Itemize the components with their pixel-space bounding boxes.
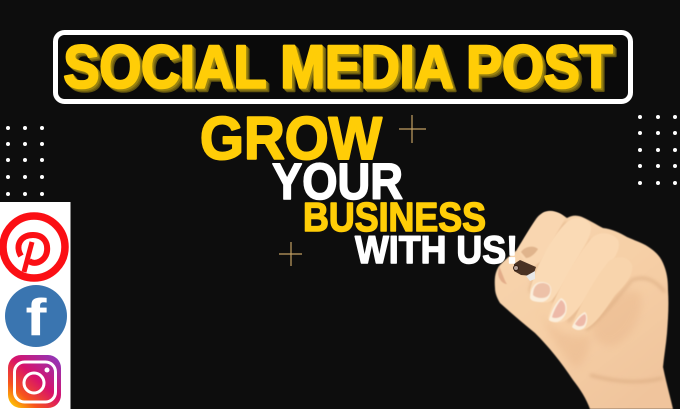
ring finger: [548, 233, 619, 323]
panel: social icons: [0, 202, 70, 409]
headline: GROW: GROW: [200, 105, 382, 172]
plus mark: bottom: [279, 242, 302, 266]
banner frame: [56, 32, 630, 102]
fingernails: [521, 247, 587, 330]
panel background: [0, 202, 70, 409]
marker: [514, 260, 536, 276]
headline: WITH US!: WITH US!: [355, 229, 518, 272]
dot grid: left: [6, 126, 44, 196]
title banner: [56, 32, 630, 104]
icon: facebook: f: [26, 289, 47, 347]
headline: BUSINESS: BUSINESS: [303, 194, 486, 240]
index finger: [517, 211, 565, 268]
title text: SOCIAL MEDIA POST: [64, 34, 612, 100]
middle finger: [530, 218, 591, 303]
icon: pinterest: [3, 216, 65, 278]
icon: instagram: [8, 355, 61, 408]
plus mark: top: [399, 115, 426, 143]
headline: YOUR: YOUR: [272, 153, 403, 210]
palm shading: [540, 291, 641, 368]
hand shape: [495, 211, 673, 409]
icon: facebook: [5, 285, 67, 347]
title text: SOCIAL MEDIA POST: [65, 35, 614, 102]
thumb nail: [498, 266, 507, 284]
title text: SOCIAL MEDIA POST: [66, 36, 615, 103]
hand holding marker: [495, 211, 673, 409]
little finger: [572, 257, 632, 330]
dot grid: right: [638, 115, 677, 185]
title text: SOCIAL MEDIA POST: [67, 37, 616, 104]
finger shadows: [530, 222, 665, 382]
